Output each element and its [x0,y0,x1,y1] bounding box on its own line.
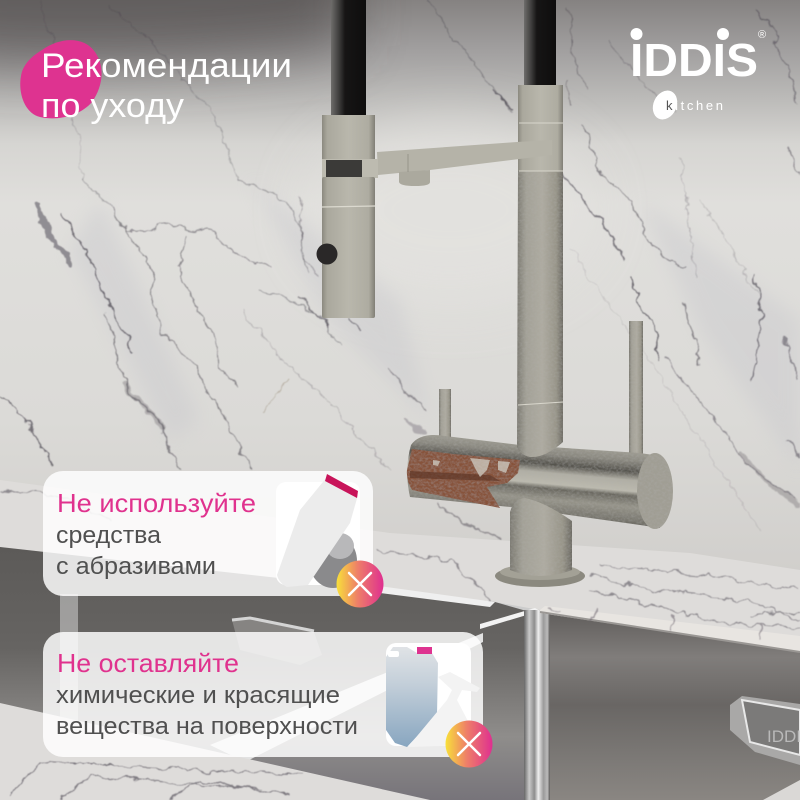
spray button [316,244,338,264]
card 2 body text [56,682,358,740]
heading: do not leave: Не оставляйте [57,648,239,678]
logo: IDDIS kitchen [630,28,766,123]
left sink bowl [0,547,530,800]
faucet [316,0,673,587]
card 1 body text: с абразивами [56,553,216,580]
card 1: no abrasives [43,471,384,608]
image: canister and spray bottle [386,643,480,747]
small left lever [439,389,451,439]
right sink bowl [540,610,800,800]
tall right lever [629,321,643,457]
left sink logo plate [232,617,322,665]
marble wall background [0,0,800,600]
right black hose [524,0,556,86]
logo: IDDIS kitchen: IDDIS [630,34,758,86]
image: cleaning powder and steel scrubber [276,474,360,588]
connecting arm [377,140,552,186]
right sink corner marble [763,780,800,800]
title: Рекомендации [41,47,292,85]
main faucet stem [517,85,563,457]
left sink lip and reflections [60,585,540,762]
heading: do not use: Не используйте [57,488,256,518]
rusted section [407,449,520,508]
chrome divider between sinks [524,610,550,800]
card 1 body text [56,522,216,580]
horizontal body [407,435,660,528]
icon: prohibited badge [446,720,492,768]
marble countertop [0,480,800,650]
title: по уходу [41,87,184,125]
logo: IDDIS kitchen: ® [758,29,766,41]
logo: IDDIS kitchen: kitchen [666,98,723,113]
card 2: no chemicals left on surface [43,632,492,768]
icon: prohibited badge [336,560,384,608]
body end cap [637,453,673,529]
card 2 body text: химические и красящие [56,682,340,709]
pink blob [20,40,102,118]
card 2 body text: вещества на поверхности [56,713,358,740]
pedestal and base [495,498,585,587]
front-left marble counter [0,703,430,800]
title [41,47,292,125]
right sink logo plate [730,696,800,765]
pull-out spray head [322,115,378,318]
left black hose [331,0,366,116]
countertop front edge [540,606,800,652]
card 1 body text: средства [56,522,162,549]
